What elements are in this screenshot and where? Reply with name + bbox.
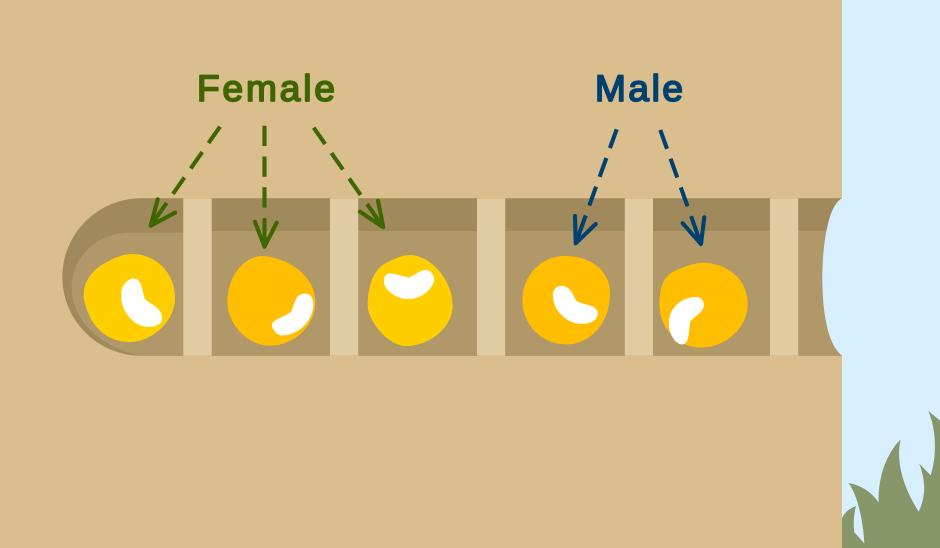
- cell 3: pollen ball and larva: [368, 255, 453, 346]
- arrow to cell 1: [151, 127, 220, 226]
- tunnel opening: [822, 198, 842, 356]
- cell dividers: [183, 198, 798, 356]
- cell 5: pollen ball and larva: [659, 263, 748, 348]
- arrow to cell 5: [660, 130, 704, 244]
- background: sky: [842, 0, 940, 548]
- arrow to cell 2: [255, 126, 277, 247]
- tunnel floor: [72, 231, 842, 356]
- heading: Female: Female: [197, 68, 335, 109]
- arrow to cell 3: [314, 128, 383, 227]
- cell 1: pollen ball and larva: [84, 254, 175, 342]
- cell 4: pollen ball and larva: [522, 256, 610, 344]
- cell 2: pollen ball and larva: [227, 256, 315, 346]
- arrow to cell 4: [575, 129, 617, 243]
- icon: grass: [842, 411, 940, 548]
- heading: Male: Male: [595, 68, 683, 109]
- tunnel upper wall: [62, 198, 842, 356]
- arrows: Female: [151, 126, 383, 247]
- arrows: Male: [575, 129, 704, 244]
- burrow tunnel: [62, 198, 843, 356]
